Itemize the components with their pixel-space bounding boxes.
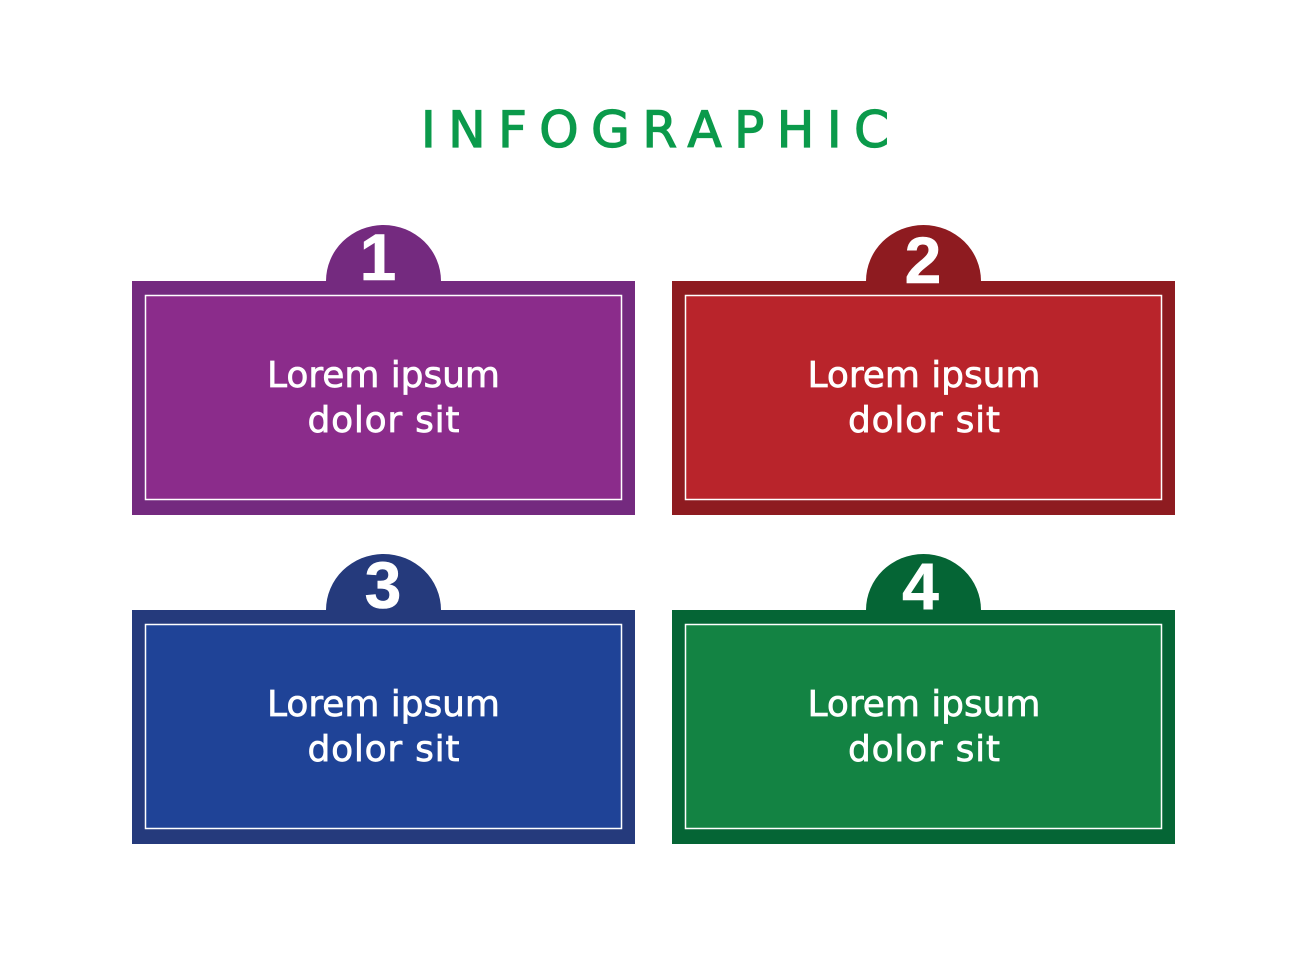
number 1: 1	[360, 220, 396, 294]
panel: item 4	[672, 549, 1175, 844]
text 3 line 2: dolor sit	[308, 729, 460, 770]
text 3: Lorem ipsum	[267, 684, 500, 725]
panel frame 3	[132, 610, 635, 844]
text 4: Lorem ipsum	[808, 684, 1040, 725]
panel fill 3	[146, 624, 622, 828]
text 1 line 2: dolor sit	[308, 400, 460, 441]
panel fill 4	[686, 624, 1162, 828]
number 2: 2	[905, 223, 941, 297]
panel fill 2	[686, 296, 1162, 500]
panel: item 2	[672, 223, 1175, 515]
text 2 line 2: dolor sit	[848, 400, 1000, 441]
number tab 4	[866, 554, 981, 611]
text 2: Lorem ipsum	[808, 355, 1040, 396]
panel fill 1	[146, 296, 622, 500]
title: INFOGRAPHIC	[421, 101, 889, 159]
number tab 1	[326, 225, 441, 282]
number tab 3	[326, 554, 441, 611]
panel frame 1	[132, 281, 635, 515]
text 1: Lorem ipsum	[267, 355, 500, 396]
panel: item 1	[132, 220, 635, 515]
number 3: 3	[365, 548, 401, 622]
number tab 2	[866, 225, 981, 282]
panel frame 2	[672, 281, 1175, 515]
panel: item 3	[132, 548, 635, 844]
number 4: 4	[902, 549, 939, 623]
panel frame 4	[672, 610, 1175, 844]
text 4 line 2: dolor sit	[848, 729, 1000, 770]
